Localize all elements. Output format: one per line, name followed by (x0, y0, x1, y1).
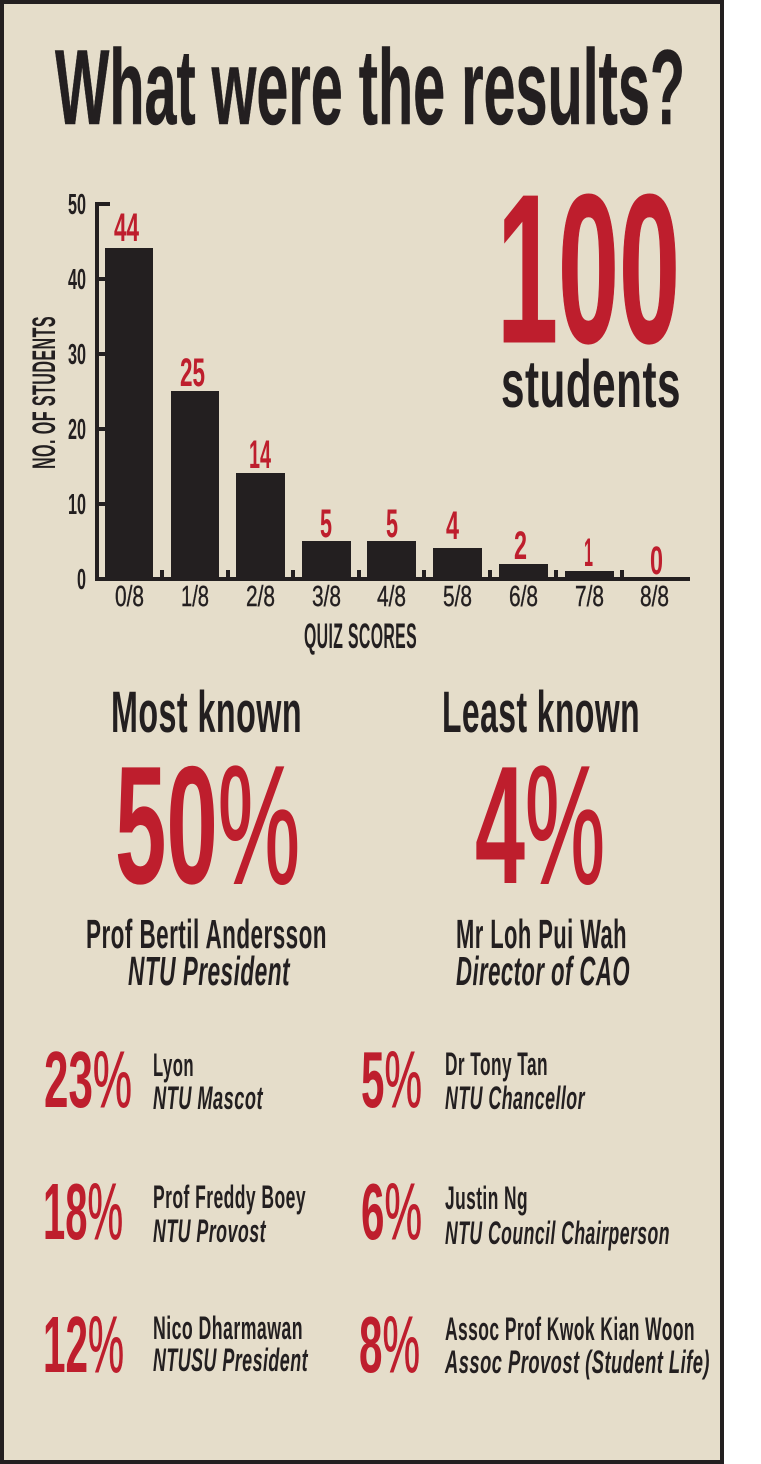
y axis labels: 30 (68, 339, 86, 371)
y axis title: NO. OF STUDENTS (26, 316, 62, 469)
x axis labels: 8/8 (640, 581, 669, 613)
y axis labels: 10 (68, 489, 86, 521)
person: Nico Dharmawan: NTUSU President (153, 1342, 308, 1378)
person: Dr Tony Tan: 5% (361, 1035, 422, 1124)
x axis labels: 7/8 (575, 581, 604, 613)
least known column (442, 680, 640, 994)
bar values: 1 (584, 531, 593, 575)
person: Justin Ng: 6% (361, 1167, 422, 1256)
person: Lyon: Lyon (153, 1047, 194, 1083)
person: Dr Tony Tan: Dr Tony Tan (445, 1046, 548, 1082)
person: Nico Dharmawan: 12% (43, 1300, 124, 1389)
person: Prof Freddy Boey (43, 1167, 306, 1256)
most known column: Prof Bertil Andersson (86, 911, 327, 957)
bar values: 44 (114, 206, 139, 250)
y axis labels: 40 (68, 264, 86, 296)
person: Lyon (44, 1035, 263, 1124)
bar values: 0 (650, 539, 663, 583)
person: Nico Dharmawan: Nico Dharmawan (153, 1310, 303, 1346)
stat: 100 students (497, 150, 681, 422)
x axis labels: 5/8 (443, 581, 472, 613)
bar values (114, 206, 663, 583)
x axis labels (115, 581, 669, 613)
person: Assoc Prof Kwok Kian Woon (359, 1300, 710, 1389)
person: Prof Freddy Boey: Prof Freddy Boey (153, 1179, 306, 1215)
y axis labels (68, 189, 86, 596)
x axis labels: 6/8 (509, 581, 538, 613)
bar values: 25 (180, 351, 205, 395)
x axis labels: 1/8 (181, 581, 209, 613)
bar values: 5 (386, 502, 398, 546)
x axis labels: 4/8 (377, 581, 406, 613)
most known column: Most known (111, 680, 302, 745)
person: Lyon: 23% (44, 1035, 132, 1124)
most known column: NTU President (128, 948, 291, 994)
person: Prof Freddy Boey: NTU Provost (153, 1213, 266, 1249)
person: Assoc Prof Kwok Kian Woon: 8% (359, 1300, 420, 1389)
axes (97, 204, 690, 579)
bar values: 2 (514, 524, 527, 568)
x axis labels: 0/8 (115, 581, 144, 613)
most known column (86, 680, 327, 994)
person: Prof Freddy Boey: 18% (43, 1167, 123, 1256)
person: Justin Ng (361, 1167, 670, 1256)
y axis labels: 0 (77, 564, 86, 596)
person: Lyon: NTU Mascot (153, 1080, 263, 1116)
y axis labels: 20 (68, 414, 86, 446)
bar values: 5 (320, 502, 332, 546)
bar values: 14 (249, 433, 271, 477)
x axis labels: 2/8 (246, 581, 275, 613)
x axis labels: 3/8 (312, 581, 341, 613)
bars (105, 248, 614, 579)
person: Dr Tony Tan (361, 1035, 585, 1124)
bar chart: quiz scores: QUIZ SCORES (304, 617, 417, 656)
person: Nico Dharmawan (43, 1300, 308, 1389)
bar chart: quiz scores (26, 189, 690, 656)
y axis labels: 50 (68, 189, 86, 221)
person: Justin Ng: Justin Ng (445, 1180, 528, 1216)
least known column: 4% (475, 731, 605, 919)
most known column: 50% (115, 731, 300, 919)
person: Dr Tony Tan: NTU Chancellor (445, 1080, 585, 1116)
bar values: 4 (446, 504, 459, 548)
